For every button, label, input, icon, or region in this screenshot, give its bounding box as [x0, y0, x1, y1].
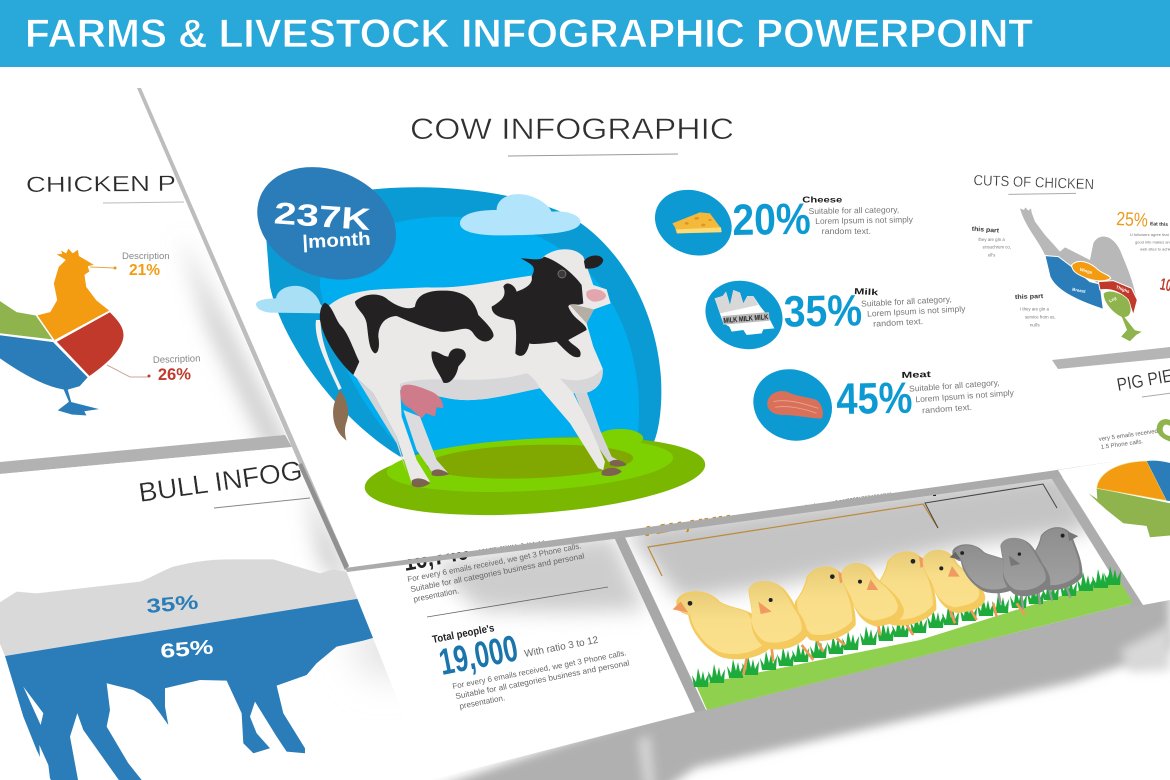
badge: 237K per month [240, 147, 413, 300]
heading: cow infographic: COW INFOGRAPHIC [410, 113, 734, 146]
chart: chicken pie silhouette [0, 248, 124, 416]
cloud: upper [460, 194, 581, 235]
stat rows [645, 179, 1015, 452]
stat: milk 35%: random text. [873, 316, 923, 329]
text: this part right [1015, 293, 1056, 328]
chick 2 [748, 581, 807, 650]
chart: bull silhouette [0, 559, 405, 780]
black patches [320, 303, 359, 375]
panel: chicken pie slide [0, 176, 288, 440]
cloud: lower [256, 286, 327, 313]
panel: chicks slide [613, 470, 1143, 712]
stat: total people 19,000: Total people's [431, 622, 496, 646]
bracket: black timeline [925, 484, 1057, 528]
heading: bull: BULL INFOG [137, 455, 304, 508]
chart: chicken cuts: Thighs [1115, 284, 1131, 294]
chick 4 [841, 563, 904, 627]
stat: 25%: 25% [1116, 209, 1148, 232]
text: pig note: very 5 emails received, [1098, 428, 1160, 443]
stat: cheese 20%: 20% [732, 195, 811, 245]
stat: milk 35%: Suitable for all category, [861, 294, 952, 309]
label: 35%: 35% [146, 592, 200, 618]
stat: total people 19,000: Suitable for all categories business and personal [455, 658, 630, 701]
chick 8 (grey) [1000, 538, 1050, 609]
grass tufts [692, 566, 1121, 687]
tail [316, 320, 342, 390]
chart: chicken cuts [1020, 207, 1143, 342]
stat: meat 45%: random text. [922, 402, 972, 415]
feet [743, 603, 1025, 675]
chicks row [673, 527, 1083, 675]
stat: cheese 20%: Lorem Ipsum is not simply [815, 214, 914, 226]
title: FARMS & LIVESTOCK INFOGRAPHIC POWERPOINT [25, 12, 1033, 56]
stat: cheese 20%: random text. [822, 226, 871, 236]
text: this part left: ensuchrum co, [983, 245, 1011, 250]
ground: green field [696, 578, 1133, 710]
stat: total people 19,000: For every 6 emails received, we get 3 Phone calls. [452, 648, 627, 691]
chart: chicken cuts: Breast [1072, 287, 1087, 294]
icon: cheese [645, 179, 742, 267]
stat: clipped 10,740: Suitable for all categories business and personal [410, 551, 585, 594]
chick 7 (grey) [950, 544, 1020, 603]
stat: clipped 10,740: With ratio 3 to 12 [478, 534, 547, 557]
panel: bull slide [0, 447, 430, 780]
callout: 26%: Description [153, 353, 201, 366]
icon: meat [742, 358, 843, 452]
far ear [584, 256, 603, 269]
badge: 237K per month: 237K [273, 196, 372, 237]
stat: clipped 10,740: 10,740 [401, 538, 471, 577]
stat: clipped 10,740: For every 6 emails received, we get 3 Phone calls. [407, 541, 582, 584]
stat: meat 45% [742, 358, 1015, 452]
chart: chicken cuts: Leg [1108, 295, 1117, 304]
text: this part left: ell's [988, 253, 995, 258]
chick 9 (grey) [1031, 527, 1083, 601]
text: this part right: null's [1030, 323, 1040, 328]
grass island [362, 427, 708, 525]
panel: main cow slide [137, 68, 1170, 572]
illustration: cow scene [240, 147, 708, 525]
udder [400, 385, 443, 418]
panel: pig pie slide [1058, 358, 1170, 605]
text: pig note [1098, 428, 1160, 451]
stat: meat 45%: Meat [901, 369, 931, 380]
text: pig note: 1.5 Phone calls. [1100, 439, 1144, 451]
chart: chicken cuts: Wings [1079, 267, 1093, 275]
stat: cheese 20%: Suitable for all category, [809, 204, 899, 216]
stat: meat 45%: 45% [836, 374, 913, 424]
chick 3 [795, 567, 856, 641]
callout: 21%: Description [122, 251, 170, 262]
icon: milk bottles [695, 269, 793, 361]
heading: chicken: CHICKEN P [26, 171, 176, 197]
stat: total people 19,000: presentation. [459, 693, 506, 711]
text: clipped description: Suitable for all categories business and personal presentation [743, 488, 892, 523]
header banner [0, 0, 1170, 67]
stat: clipped 10,740: presentation. [413, 586, 460, 604]
stat: clipped 720,000: 720,000 [638, 498, 733, 543]
stat: meat 45%: Lorem Ipsum is not simply [915, 387, 1015, 404]
badge: 237K per month: |month [302, 228, 371, 252]
callout: 21%: 21% [129, 262, 160, 279]
hooves [412, 478, 430, 487]
stat: clipped 10,740 [401, 534, 585, 604]
panel: total people's statistics [345, 534, 695, 780]
callout: 26% [107, 353, 201, 384]
chick 5 [875, 551, 936, 626]
stat: milk 35%: Lorem Ipsum is not simply [867, 303, 966, 319]
stat: total people 19,000 [431, 622, 630, 711]
divider strip between chicken and bull slides [0, 435, 292, 474]
stat: cheese 20% [645, 179, 914, 267]
text: this part right: this part [1015, 293, 1044, 301]
heading: cuts of chicken: CUTS OF CHICKEN [973, 173, 1094, 193]
stat: meat 45%: Suitable for all category, [909, 377, 1000, 394]
shading on belly [400, 373, 540, 400]
text: this part right: service from us, [1025, 314, 1056, 319]
far legs [403, 410, 448, 473]
panel: bottom drop shadow [400, 585, 1170, 780]
stat: milk 35%: 35% [783, 286, 862, 337]
stat: milk 35%: Milk [854, 286, 879, 297]
backdrop: outer blue blob [266, 187, 661, 457]
body [320, 249, 611, 483]
stat: 25% [1116, 209, 1170, 252]
chick 6 [923, 550, 985, 613]
stat: cheese 20%: Cheese [802, 195, 843, 205]
stat: total people 19,000: 19,000 [436, 628, 521, 683]
panel: cuts of chicken [972, 173, 1170, 342]
callout: 21% [90, 251, 170, 279]
text: this part left [972, 226, 1011, 258]
cow [316, 249, 627, 487]
text: this part right: I they are gIn a [1020, 307, 1049, 312]
stat: total people 19,000: With ratio 3 to 12 [523, 635, 600, 660]
chick 1 [673, 591, 770, 659]
icon: milk bottles: MILK MILK MILK [723, 312, 769, 325]
bracket: orange timeline [648, 504, 938, 576]
text: this part left: they are gIn a [978, 237, 1005, 242]
edge: main slide left and bottom [137, 88, 349, 570]
callout: 26%: 26% [158, 365, 191, 384]
text: this part left: this part [972, 226, 1000, 235]
stat: milk 35% [695, 269, 966, 361]
strip: bottom edge of cuts of chicken slide [1052, 347, 1170, 369]
stat: 25%: Eat this [1150, 221, 1168, 228]
backdrop: inner blue blob [320, 217, 639, 453]
snout [586, 289, 606, 302]
label: 65%: 65% [160, 636, 215, 663]
chart: pig pie [1088, 419, 1170, 537]
